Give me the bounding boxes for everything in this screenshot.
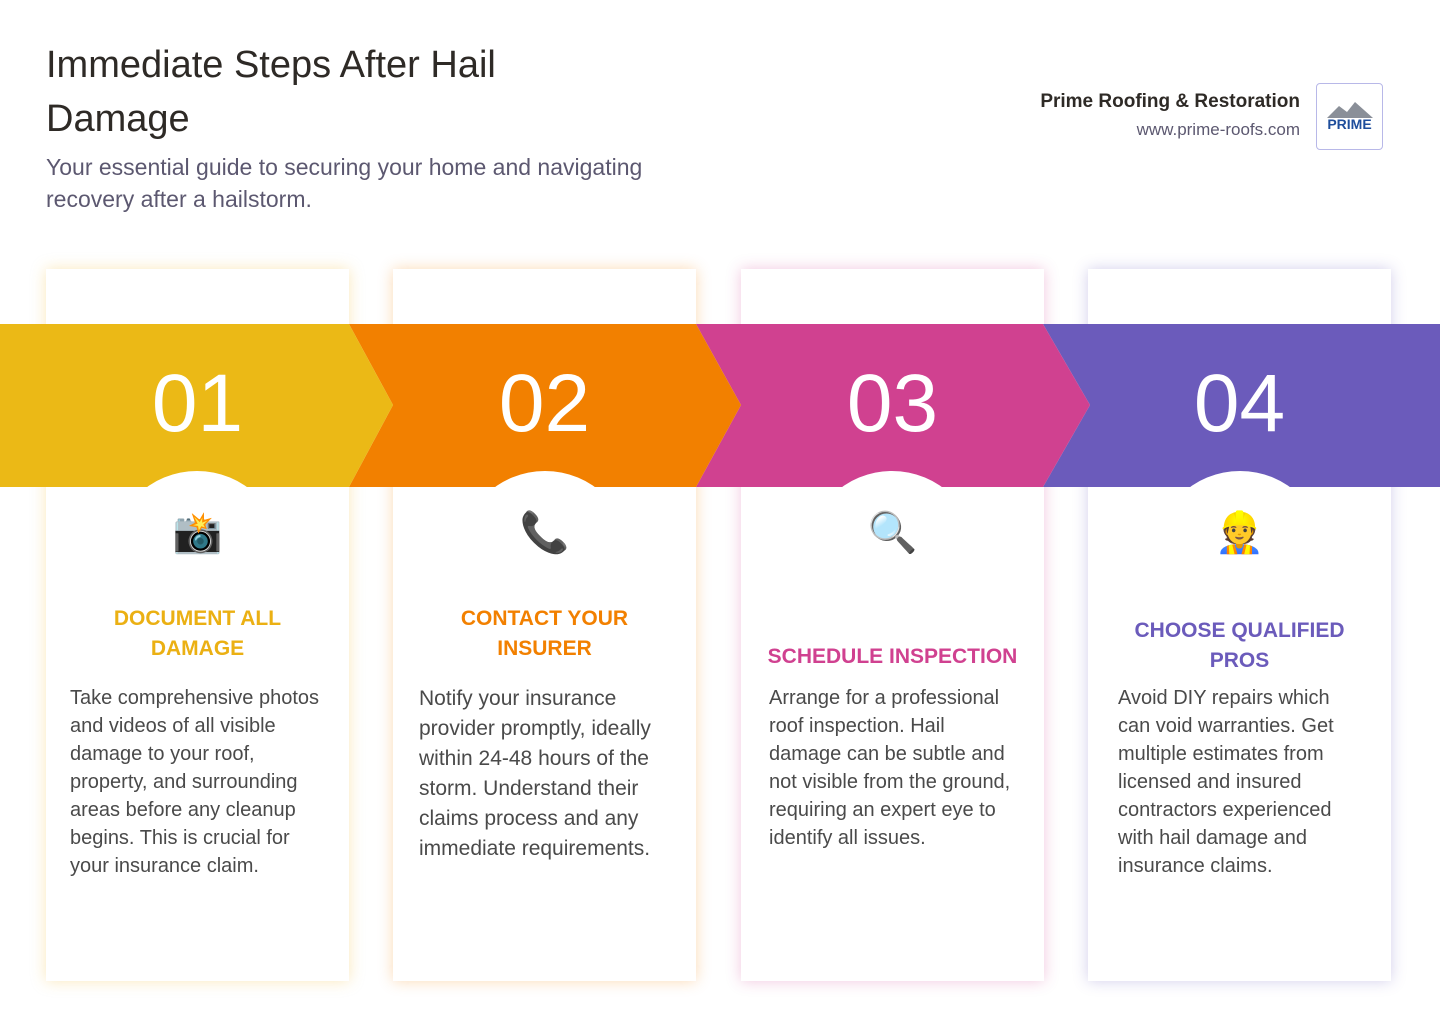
number 01: 01 [152,358,243,449]
card 1 shadow panel [46,269,349,981]
text: Notify your insurance provider promptly, ideally within 24-48 hours of the storm. Understand their claims process and any immediate requirements. [419,687,651,860]
step 2 [419,358,651,860]
heading: DOCUMENT ALL DAMAGE [114,607,281,660]
icon: phone: 📞 [520,509,569,556]
icon: camera: 📸 [173,509,222,556]
icon: magnifier: 🔍 [868,509,917,556]
text: Take comprehensive photos and videos of all visible damage to your roof, property, and surrounding areas before any cleanup begins. This is crucial for your insurance claim. [70,687,319,877]
number 04: 04 [1194,358,1285,449]
step 4 [1118,358,1344,877]
brand url: www.prime-roofs.com [1137,120,1300,139]
number 03: 03 [847,358,938,449]
icon: worker: 👷 [1215,509,1264,556]
card 4 panel [1088,269,1391,981]
heading: SCHEDULE INSPECTION [768,645,1017,668]
step 1 [70,358,319,877]
step 3 [768,358,1017,849]
subtitle: Your essential guide to securing your home and navigating recovery after a hailstorm. [46,154,642,212]
number 02: 02 [499,358,590,449]
text: Arrange for a professional roof inspection. Hail damage can be subtle and not visible from the ground, requiring an expert eye to identify all issues. [769,687,1010,849]
arrow band [0,324,1440,487]
text: Avoid DIY repairs which can void warranties. Get multiple estimates from licensed and insured contractors experienced with hail damage and insurance claims. [1118,687,1334,877]
heading: CONTACT YOUR INSURER [461,607,628,660]
logo [1316,83,1383,150]
card 3 panel [741,269,1044,981]
brand name: Prime Roofing & Restoration [1040,91,1300,112]
card 2 panel [393,269,696,981]
logo: PRIME [1327,116,1372,132]
heading: CHOOSE QUALIFIED PROS [1134,619,1344,672]
title: Immediate Steps After Hail Damage [46,44,496,140]
circles [111,471,283,643]
brand block [1040,83,1383,150]
